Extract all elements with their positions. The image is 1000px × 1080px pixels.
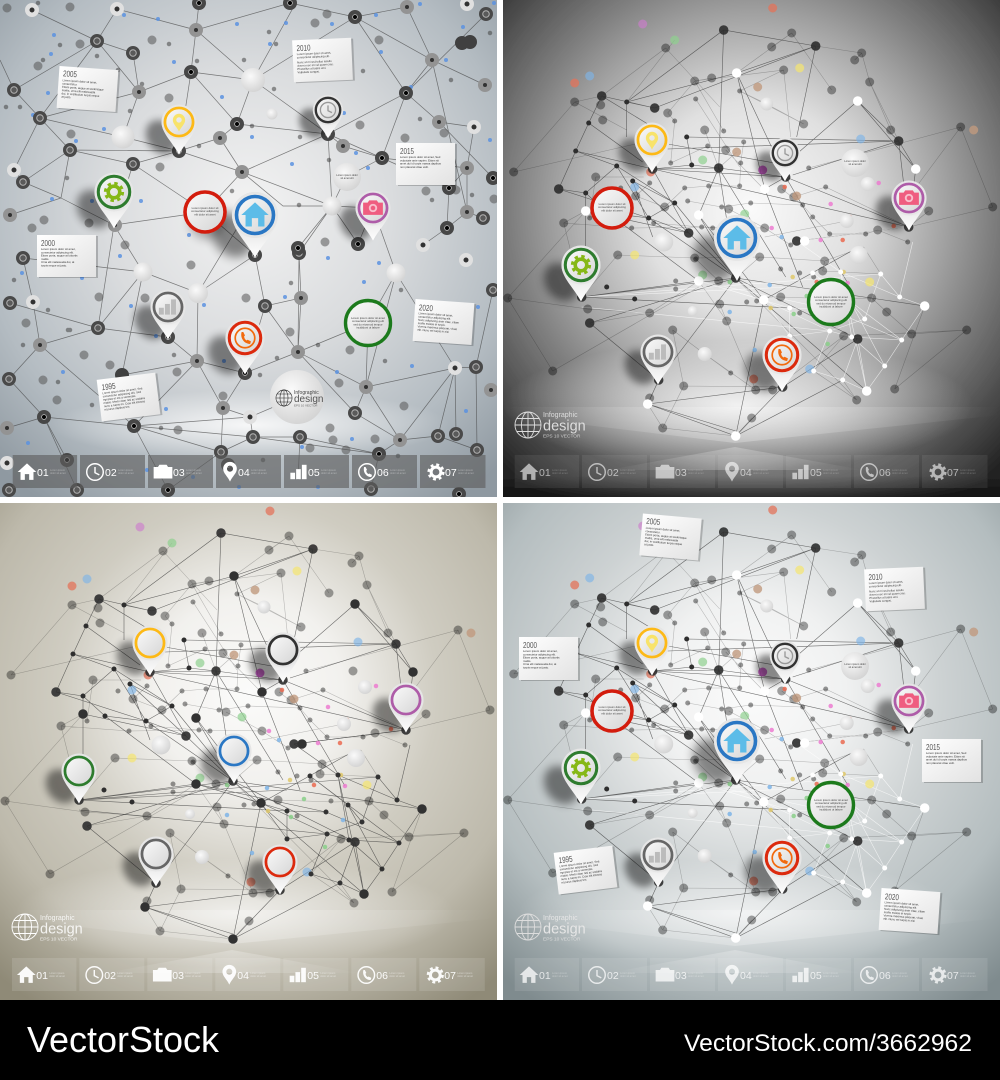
panel: grey-blue network with note cards — [0, 0, 497, 497]
footer menu bar: dolor sit amet — [823, 974, 839, 978]
footer menu bar: Lorem ipsum — [892, 972, 907, 975]
footer menu bar: Lorem ipsum — [620, 972, 635, 975]
footer menu bar: Lorem ipsum — [620, 469, 635, 472]
green text circle — [808, 782, 854, 828]
logo circle: design — [294, 394, 323, 405]
footer menu bar: 05 — [810, 970, 822, 982]
note card 2010: 2010 — [296, 43, 311, 53]
pin: clock — [750, 138, 800, 186]
red text circle — [185, 192, 225, 239]
text sphere: sit amet elit — [340, 176, 354, 180]
note card 2005: mattis, urna elit malesuada — [645, 536, 679, 543]
note card 2010: consectetur adipiscing elit. — [297, 54, 330, 59]
red text circle: consectetur adipiscing — [598, 708, 626, 712]
note card 2015 — [396, 143, 457, 186]
footer bar: VectorStock credit — [0, 1000, 1000, 1080]
note card 1995: mattis. Morbi vitae nisl ac sodales — [560, 869, 603, 878]
footer menu bar: Lorem ipsum — [552, 972, 567, 975]
panel: blue-grey network with note cards — [503, 503, 1000, 1000]
logo: EPS 10 VECTOR — [543, 936, 581, 942]
pin: grey — [116, 837, 173, 892]
footer menu bar: 06 — [879, 970, 891, 982]
pin: chart — [618, 838, 675, 893]
footer menu bar: Lorem ipsum — [251, 469, 266, 472]
footer menu bar: 01 — [36, 970, 48, 982]
logo: design — [543, 418, 586, 434]
note card 2015: Lorem ipsum dolor sit amet, Sed — [926, 751, 966, 755]
footer menu bar: 02 — [104, 970, 116, 982]
ring nodes — [7, 3, 493, 494]
footer menu bar: dolor sit amet — [688, 471, 704, 475]
footer menu bar: Lorem ipsum — [892, 469, 907, 472]
note card 2010: viverra nec mi vel quam cras. — [869, 591, 906, 597]
note card 2000: turpis neque at justo. — [41, 264, 67, 268]
note card 1995: egestas et est a venenatis — [560, 867, 593, 875]
note card 2020: mollis massa et turpis. — [418, 321, 446, 327]
footer menu bar: dolor sit amet — [458, 471, 474, 475]
note card 2005: dui, in vestibulum turpis neque — [61, 91, 100, 98]
footer menu bar: dolor sit amet — [321, 471, 337, 475]
footer menu bar: 06 — [879, 467, 891, 479]
red text circle: elit dolor sit amet — [194, 212, 216, 216]
text sphere: Lorem ipsum dolor — [844, 663, 866, 666]
green text circle: incididunt ut labore — [819, 305, 843, 309]
footer menu bar: 07 — [947, 970, 959, 982]
pin: phone — [201, 318, 265, 381]
green text circle: sed do eiusmod tempor — [816, 301, 846, 305]
note card 2005: Lorem ipsum dolor sit amet, — [62, 78, 97, 85]
footer menu bar: dolor sit amet — [117, 974, 133, 978]
note card 2005: consectetur. — [645, 529, 661, 534]
red text circle — [592, 691, 632, 731]
pin: gear — [537, 748, 601, 811]
note card 2000: 2000 — [523, 640, 537, 650]
light spheres — [112, 68, 406, 303]
note card 2010: Phasellus at turpis orci. — [869, 595, 899, 600]
note card 2000: consectetur adipiscing elit. — [523, 652, 556, 656]
note card 2015: 2015 — [926, 742, 940, 752]
network — [508, 510, 993, 938]
footer menu bar: 05 — [810, 467, 822, 479]
footer menu bar: dolor sit amet — [389, 974, 405, 978]
note card 2000: mattis. — [41, 257, 49, 261]
footer menu bar: 03 — [675, 970, 687, 982]
note card 2010: viverra nec mi vel quam cras. — [297, 62, 334, 68]
panel 1 background — [0, 0, 497, 497]
footer menu bar: Lorem ipsum — [960, 972, 975, 975]
note card 2000 — [519, 637, 580, 681]
green text circle: Lorem ipsum dolor sit amet — [814, 798, 848, 802]
logo circle: Infographic — [294, 390, 319, 396]
logo: Infographic — [40, 915, 75, 922]
note card 1995: et purus dapibus leo. — [104, 404, 131, 412]
red text circle: Lorem ipsum dolor sit — [599, 705, 625, 709]
footer menu bar: Lorem ipsum — [186, 469, 201, 472]
note card 2000: Lorem ipsum dolor sit amet, — [41, 247, 76, 251]
footer menu bar: dolor sit amet — [185, 974, 201, 978]
note card 2005: Etiam porta, augue at scelerisque — [645, 532, 687, 540]
red text circle: elit dolor sit amet — [601, 208, 623, 212]
footer menu bar: dolor sit amet — [753, 471, 769, 475]
red text circle: elit dolor sit amet — [601, 711, 623, 715]
pin: home — [685, 215, 760, 289]
pin: chart — [618, 335, 675, 390]
green text circle: sed do eiusmod tempor — [353, 322, 383, 326]
note card 2020: Lorem ipsum dolor sit amet, — [418, 311, 453, 318]
text sphere — [333, 163, 361, 191]
note card 2020: 2020 — [419, 302, 433, 313]
footer menu bar: 07 — [445, 467, 457, 479]
footer menu bar: Lorem ipsum — [458, 469, 473, 472]
footer menu bar: Lorem ipsum — [320, 972, 335, 975]
text sphere — [841, 652, 869, 680]
footer menu bar: 04 — [238, 467, 250, 479]
footer menu bar: dolor sit amet — [892, 974, 908, 978]
logo: design — [543, 922, 586, 938]
note card 2000 — [37, 235, 98, 278]
pin: red — [240, 845, 297, 900]
footer menu bar: Lorem ipsum — [688, 972, 703, 975]
pin: purple — [366, 683, 423, 738]
note card 2010 — [864, 567, 927, 612]
red text circle: Lorem ipsum dolor sit — [192, 206, 218, 210]
pin: gear — [537, 245, 601, 308]
pin: camera — [333, 191, 390, 246]
note card 2010: Nunc at mi sed tellus iaculis — [297, 59, 332, 64]
footer menu bar: dolor sit amet — [50, 471, 66, 475]
footer menu bar: Lorem ipsum — [753, 972, 768, 975]
note card 2010: consectetur adipiscing elit. — [869, 583, 902, 588]
green text circle: consectetur adipiscing elit — [352, 319, 384, 323]
note card 2010: Lorem ipsum dolor sit amet, — [869, 580, 903, 585]
note card 1995: 1995 — [558, 854, 573, 865]
green text circle: incididunt ut labore — [356, 326, 380, 330]
footer menu bar: 06 — [376, 970, 388, 982]
note card 2015: Lorem ipsum dolor sit amet, Sed — [400, 155, 440, 159]
pin: yellow location — [612, 123, 669, 178]
logo: Infographic — [543, 412, 578, 419]
text sphere: sit amet elit — [848, 162, 862, 166]
note card 2020: consectetur adipiscing elit. — [418, 315, 451, 321]
footer menu bar: 04 — [740, 467, 752, 479]
note card 2000: Etiam porta, augue at lobortis — [523, 656, 560, 660]
pin: phone — [738, 838, 802, 901]
green text circle — [808, 280, 854, 324]
note card 2020: Nunc adipiscing ante vitae, etiam — [884, 907, 926, 914]
pin: yellow location — [139, 105, 196, 160]
network lines — [0, 3, 493, 490]
footer menu bar: 01 — [37, 467, 49, 479]
footer menu bar: 01 — [539, 467, 551, 479]
note card 2000: 2000 — [41, 238, 55, 248]
pin: black — [243, 633, 300, 688]
network — [5, 511, 490, 939]
footer menu bar: dolor sit amet — [688, 974, 704, 978]
note card 2020: 2020 — [885, 891, 899, 902]
note card 2005: 2005 — [646, 516, 661, 527]
footer menu bar: 01 — [539, 970, 551, 982]
note card 1995: egestas et est a venenatis — [103, 394, 136, 402]
note card 1995 — [554, 845, 619, 895]
footer menu bar: dolor sit amet — [552, 974, 568, 978]
footer menu bar: 03 — [172, 970, 184, 982]
green text circle: consectetur adipiscing elit — [815, 801, 847, 805]
text sphere: sit amet elit — [848, 665, 862, 669]
note card 2020 — [879, 888, 942, 935]
panel 4 background — [503, 503, 1000, 1000]
footer menu bar — [13, 455, 485, 488]
note card 2005: consectetur. — [62, 82, 78, 87]
panel: beige network — [0, 503, 497, 1000]
footer menu bar: dolor sit amet — [552, 471, 568, 475]
note card 2005: dui, in vestibulum turpis neque — [644, 539, 683, 546]
logo circle — [270, 370, 324, 424]
text sphere — [841, 149, 869, 177]
green text circle: sed do eiusmod tempor — [816, 804, 846, 808]
panel 3 background — [0, 503, 497, 1000]
footer menu bar: 06 — [377, 467, 389, 479]
note card 2015: amet dui id turpis massa dapibus — [400, 162, 441, 166]
note card 2010: Nunc at mi sed tellus iaculis — [869, 588, 904, 593]
footer menu bar: Lorem ipsum — [552, 469, 567, 472]
pin: yellow location — [612, 626, 669, 681]
note card 2000: mattis. — [523, 659, 531, 663]
note card 2000: Lorem ipsum dolor sit amet, — [523, 649, 558, 653]
footer menu bar: dolor sit amet — [251, 471, 267, 475]
footer menu bar: 04 — [740, 970, 752, 982]
note card 2020: elit. Nunc vel turpis in nisi — [883, 917, 915, 923]
footer menu bar: dolor sit amet — [320, 974, 336, 978]
note card 2000: Urna elit malesuada dui, at — [523, 662, 556, 666]
note card 2015: 2015 — [400, 146, 414, 156]
note card 2020: Lorem ipsum dolor sit amet, — [884, 900, 919, 907]
note card 2020: elit. Nunc vel turpis in nisi — [417, 328, 449, 334]
note card 2020 — [413, 299, 476, 346]
footer menu bar: 02 — [607, 970, 619, 982]
text sphere: Lorem ipsum dolor — [844, 160, 866, 163]
note card 2005 — [639, 513, 704, 562]
note card 2015: vulputate ante sapien. Etiam sit — [926, 754, 965, 758]
footer menu bar — [12, 958, 485, 991]
note card 2005 — [57, 66, 120, 113]
note card 2015: non placerat vitae velit. — [926, 761, 955, 765]
footer menu bar: 05 — [308, 467, 320, 479]
footer menu bar: 03 — [675, 467, 687, 479]
logo: EPS 10 VECTOR — [40, 936, 78, 942]
note card 1995: nunc a turpis mi. Cras elit lobortis — [561, 872, 603, 881]
footer menu bar: dolor sit amet — [960, 471, 976, 475]
note card 2010: Vulputate congue. — [869, 598, 892, 603]
plain grey nodes — [7, 7, 494, 450]
pin: chart — [128, 290, 185, 345]
logo: design — [40, 922, 83, 938]
red text circle — [592, 188, 632, 228]
blue nodes — [22, 3, 494, 487]
footer menu bar: Lorem ipsum — [321, 469, 336, 472]
pin: camera — [869, 181, 926, 236]
logo — [515, 914, 586, 942]
brand name: VectorStock — [27, 1019, 220, 1060]
green text circle: consectetur adipiscing elit — [815, 298, 847, 302]
panel 2 background — [503, 0, 1000, 497]
footer menu bar: dolor sit amet — [753, 974, 769, 978]
logo: Infographic — [543, 915, 578, 922]
green text circle: Lorem ipsum dolor sit amet — [814, 295, 848, 299]
note card 2020: Viverra maximus placerat, vivas — [883, 913, 924, 920]
footer menu bar: Lorem ipsum — [823, 469, 838, 472]
note card 2020: mollis massa et turpis. — [884, 910, 912, 916]
green text circle: Lorem ipsum dolor sit amet — [351, 316, 385, 320]
note card 2015: vulputate ante sapien. Etiam sit — [400, 158, 439, 162]
note card 2000: consectetur adipiscing elit. — [41, 250, 74, 254]
footer menu bar: 04 — [237, 970, 249, 982]
red text circle: consectetur adipiscing — [191, 209, 219, 213]
note card 1995 — [97, 372, 162, 422]
network — [508, 8, 993, 436]
footer menu bar: dolor sit amet — [823, 471, 839, 475]
note card 1995: consectetur adipiscing elit. Sed — [102, 390, 142, 398]
pin: clock — [750, 641, 800, 689]
footer menu bar: Lorem ipsum — [389, 972, 404, 975]
pin: green — [39, 754, 96, 809]
footer menu bar: dolor sit amet — [186, 471, 202, 475]
footer menu bar — [515, 958, 988, 991]
note card 2005: at justo. — [644, 542, 654, 547]
pin: yellow — [110, 626, 167, 681]
footer menu bar: Lorem ipsum — [50, 469, 65, 472]
footer menu bar: dolor sit amet — [892, 471, 908, 475]
note card 2020: Nunc adipiscing ante vitae, etiam — [418, 318, 460, 325]
note card 2005: Lorem ipsum dolor sit amet, — [646, 526, 680, 533]
pin: home — [203, 192, 278, 266]
footer menu bar: Lorem ipsum — [117, 972, 132, 975]
note card 2015: non placerat vitae velit. — [400, 165, 429, 169]
note card 2010: Phasellus at turpis orci. — [297, 66, 327, 71]
footer menu bar: Lorem ipsum — [823, 972, 838, 975]
logo — [515, 412, 586, 440]
red text circle: Lorem ipsum dolor sit — [599, 202, 625, 206]
footer menu bar: Lorem ipsum — [118, 469, 133, 472]
footer menu bar: dolor sit amet — [49, 974, 65, 978]
footer menu bar: dolor sit amet — [620, 974, 636, 978]
red text circle: consectetur adipiscing — [598, 205, 626, 209]
note card 2010: 2010 — [868, 572, 883, 582]
note card 1995: et purus dapibus leo. — [561, 877, 588, 885]
pin: blue — [194, 734, 251, 789]
footer menu bar: Lorem ipsum — [185, 972, 200, 975]
image url: VectorStock.com/3662962 — [684, 1030, 972, 1057]
note card 2015 — [922, 739, 983, 783]
footer menu bar: Lorem ipsum — [457, 972, 472, 975]
footer menu bar: dolor sit amet — [250, 974, 266, 978]
note card 2005: mattis, urna elit malesuada — [62, 88, 96, 94]
note card 2010: Vulputate congue. — [297, 69, 320, 74]
footer menu bar: 02 — [105, 467, 117, 479]
panel: dark grey network — [503, 0, 1000, 497]
note card 1995: consectetur adipiscing elit. Sed — [559, 863, 599, 871]
footer menu bar: dolor sit amet — [457, 974, 473, 978]
note card 1995: 1995 — [101, 381, 116, 392]
footer menu bar: dolor sit amet — [118, 471, 134, 475]
footer menu bar: 07 — [947, 467, 959, 479]
footer menu bar: 07 — [444, 970, 456, 982]
text sphere: Lorem ipsum dolor — [336, 174, 358, 177]
note card 1995: nunc a turpis mi. Cras elit lobortis — [104, 399, 146, 408]
footer menu bar: 02 — [607, 467, 619, 479]
small grey nodes — [6, 3, 490, 460]
footer menu bar: dolor sit amet — [620, 471, 636, 475]
footer menu bar: dolor sit amet — [960, 974, 976, 978]
logo circle: EPS 10 VECTOR — [294, 404, 318, 408]
logo: EPS 10 VECTOR — [543, 434, 581, 440]
footer menu bar: dolor sit amet — [390, 471, 406, 475]
footer menu bar: 05 — [307, 970, 319, 982]
footer menu bar: Lorem ipsum — [753, 469, 768, 472]
note card 2005: 2005 — [63, 68, 78, 79]
note card 2010: Lorem ipsum dolor sit amet, — [297, 51, 331, 56]
note card 1995: Lorem ipsum dolor sit amet, Sed — [559, 859, 600, 868]
note card 2020: Viverra maximus placerat, vivas — [417, 324, 458, 331]
note card 2000: Urna elit malesuada dui, at — [41, 260, 74, 264]
note card 1995: Lorem ipsum dolor sit amet, Sed — [102, 386, 143, 395]
pin: phone — [738, 335, 802, 398]
note card 2005: Etiam porta, augue at scelerisque — [62, 85, 104, 92]
pin: camera — [869, 684, 926, 739]
footer menu bar: Lorem ipsum — [688, 469, 703, 472]
footer menu bar: Lorem ipsum — [250, 972, 265, 975]
pin: clock — [293, 95, 343, 143]
footer menu bar — [515, 455, 988, 488]
note card 2005: at justo. — [61, 95, 72, 99]
note card 2015: amet dui id turpis massa dapibus — [926, 758, 967, 762]
note card 2000: turpis neque at justo. — [523, 666, 549, 670]
note card 1995: mattis. Morbi vitae nisl ac sodales — [103, 396, 146, 405]
note card 2000: Etiam porta, augue at lobortis — [41, 254, 78, 258]
green text circle — [346, 300, 390, 346]
note card 2020: consectetur adipiscing elit. — [884, 904, 917, 910]
pin: home — [685, 718, 760, 792]
note card 2010 — [292, 38, 355, 83]
footer menu bar: Lorem ipsum — [49, 972, 64, 975]
logo — [12, 914, 83, 942]
footer menu bar: 03 — [173, 467, 185, 479]
pin: gear — [70, 172, 134, 235]
footer menu bar: Lorem ipsum — [960, 469, 975, 472]
footer menu bar: Lorem ipsum — [390, 469, 405, 472]
green text circle: incididunt ut labore — [819, 808, 843, 812]
